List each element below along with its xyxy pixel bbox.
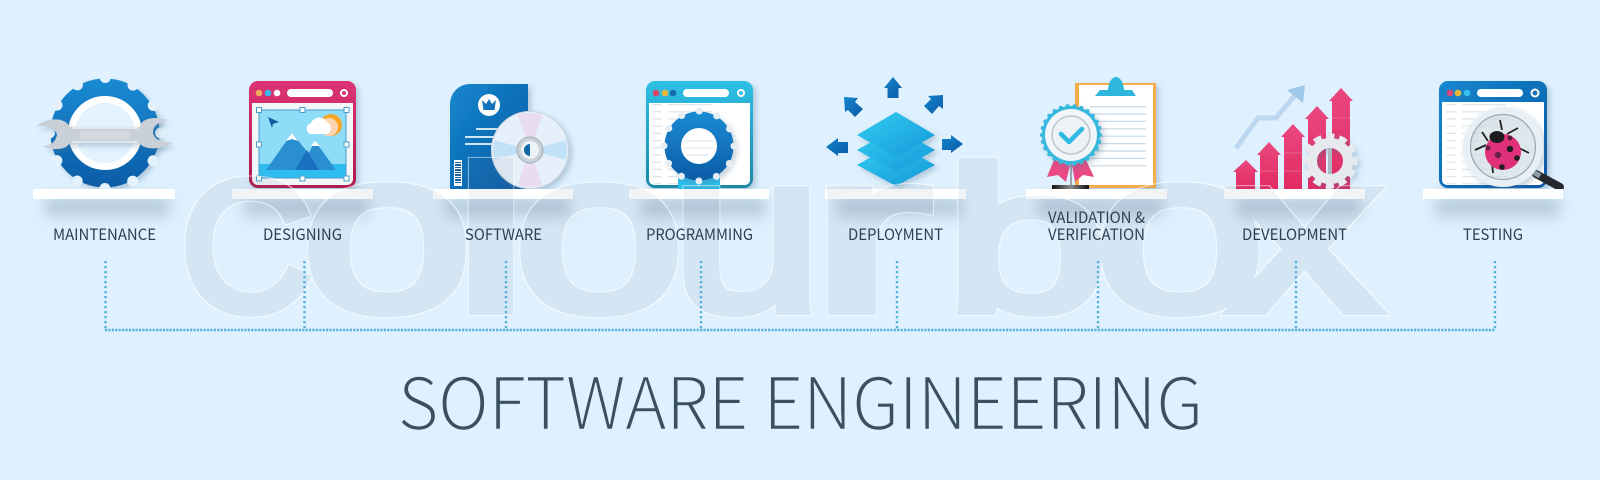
arrows — [826, 77, 963, 156]
gear — [1305, 136, 1355, 186]
icon: deployment layers and arrows — [826, 77, 963, 186]
icon: programming window with gear — [646, 81, 753, 189]
watermark: Colourbox: o — [1095, 105, 1265, 359]
watermark: Colourbox: C — [181, 143, 312, 349]
magnifier — [1466, 110, 1560, 187]
shelf shadows — [45, 197, 1560, 217]
label: development: DEVELOPMENT — [1242, 223, 1347, 245]
dotted connector — [105, 261, 1495, 330]
watermark: Colourbox: r — [811, 106, 931, 358]
label: validation and verification — [1048, 206, 1145, 245]
shelf tops — [33, 189, 1563, 199]
label: maintenance: MAINTENANCE — [53, 223, 156, 245]
icon: development bars and gear — [1233, 85, 1355, 189]
watermark: Colourbox: o — [302, 105, 472, 359]
watermark: Colourbox: b — [946, 127, 1107, 354]
compact disc — [490, 110, 570, 190]
watermark: Colourbox: o — [514, 105, 684, 359]
label: validation and verification: VALIDATION & — [1048, 206, 1145, 228]
label: deployment: DEPLOYMENT — [848, 223, 943, 245]
watermark: Colourbox: x — [1230, 106, 1380, 358]
title: SOFTWARE ENGINEERING — [398, 348, 1203, 450]
label: designing: DESIGNING — [263, 223, 342, 245]
watermark: Colourbox: u — [672, 106, 822, 358]
icon: testing window with ladybug — [1439, 81, 1560, 188]
icon: designing window — [249, 81, 356, 188]
watermark: Colourbox — [181, 105, 1380, 359]
ribbon and stand — [1047, 160, 1094, 182]
label: validation and verification: VERIFICATION — [1048, 223, 1145, 245]
icon: validation clipboard and badge — [1042, 77, 1156, 189]
icon: maintenance gear and wrench — [36, 78, 172, 188]
ladybug — [1475, 120, 1529, 173]
icon: software box and disc — [450, 84, 570, 190]
badge — [1042, 106, 1100, 164]
picture — [259, 110, 346, 178]
label: programming: PROGRAMMING — [646, 223, 753, 245]
gear — [678, 173, 720, 189]
selection handles — [256, 108, 349, 181]
label: software: SOFTWARE — [465, 223, 542, 245]
label: testing: TESTING — [1463, 223, 1523, 245]
clip — [1095, 77, 1136, 96]
trend arrow — [1236, 85, 1305, 148]
watermark: Colourbox: l — [455, 127, 527, 354]
